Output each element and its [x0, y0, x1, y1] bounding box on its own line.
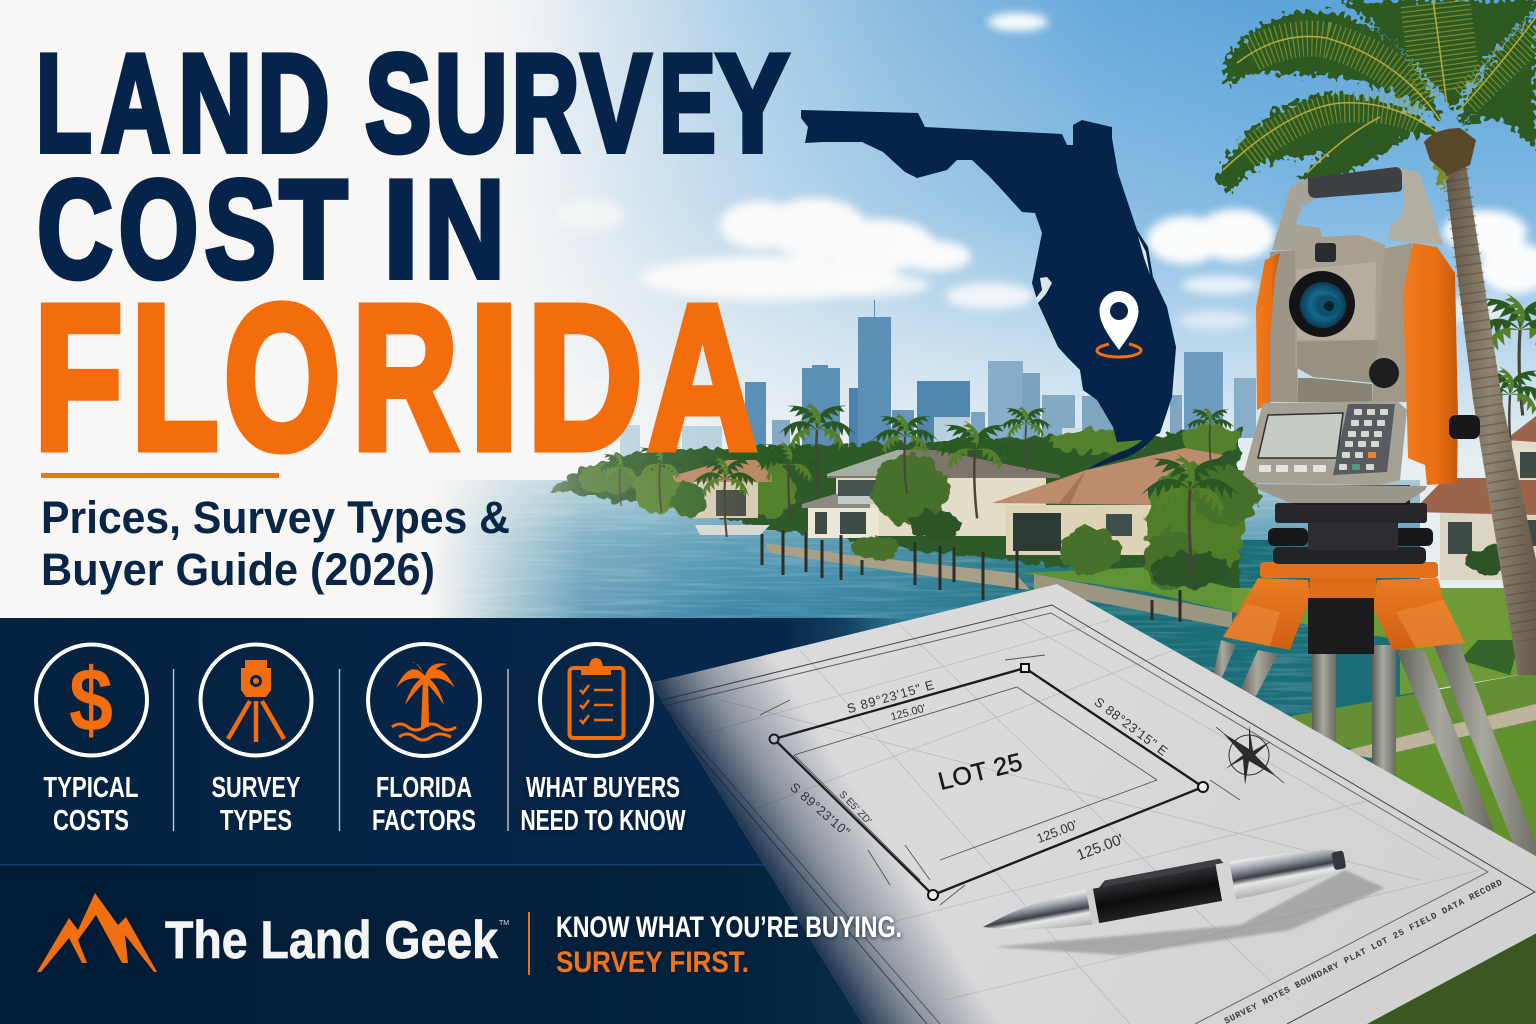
keypad — [1333, 404, 1395, 475]
bearing labels: S 88°23'15" E — [1092, 694, 1171, 759]
separators — [174, 669, 508, 831]
orange plate — [1260, 562, 1438, 578]
carrying handle — [1272, 167, 1443, 250]
small palm trees — [598, 287, 1536, 576]
tripod head left — [1223, 578, 1310, 650]
east coast lagoon — [1138, 236, 1150, 275]
lot label: LOT 25 — [935, 748, 1026, 796]
subtitle: Prices, Survey Types & — [41, 492, 510, 543]
teal water near the seawall — [800, 540, 1420, 780]
label: florida factors: FACTORS — [372, 805, 476, 837]
brand footer — [37, 893, 902, 979]
bearing labels: 125.00' — [889, 703, 927, 723]
label: florida factors: FLORIDA — [376, 772, 472, 804]
skyline — [620, 300, 1256, 465]
tagline: KNOW WHAT YOU’RE BUYING. — [556, 911, 902, 944]
label: typical costs: TYPICAL — [44, 772, 138, 804]
camera block — [1295, 235, 1385, 383]
lcd screen — [1258, 413, 1343, 458]
title line: LAND SURVEY: Y — [716, 26, 789, 181]
focus knob — [1369, 358, 1399, 388]
title line: COST IN: O — [119, 152, 198, 307]
compass rose — [1216, 725, 1284, 785]
far shoreline foliage — [550, 424, 1240, 590]
title line: FLORIDA: F — [34, 263, 122, 492]
lot boundary — [774, 668, 1203, 895]
title line: LAND SURVEY: U — [435, 26, 508, 181]
title line: COST IN: I — [384, 152, 418, 307]
feature: what buyers need to know — [520, 644, 686, 837]
label: typical costs: COSTS — [53, 805, 129, 837]
palm trunk — [1444, 165, 1536, 675]
icon: clipboard checklist — [540, 644, 652, 756]
florida keys — [1087, 420, 1162, 470]
main title — [34, 26, 789, 492]
orange housing left — [1256, 253, 1280, 410]
florida map — [801, 110, 1176, 470]
house: right side — [1412, 416, 1536, 580]
logo mountains — [37, 893, 157, 972]
label: what buyers need to know: NEED TO KNOW — [520, 805, 686, 837]
feature: survey types — [200, 644, 312, 837]
label: survey types: SURVEY — [212, 772, 300, 804]
tripod legs — [1212, 640, 1536, 860]
house: terracotta roof — [992, 448, 1223, 555]
lawns behind the instrument — [1020, 567, 1536, 1024]
subtitle — [41, 492, 510, 595]
icon: dollar sign — [36, 644, 147, 756]
icon: palm tree and waves — [368, 644, 480, 756]
display panel — [1243, 401, 1407, 485]
feature: florida factors — [368, 644, 480, 837]
water — [380, 480, 1420, 780]
bearing labels: 125.00' — [1034, 817, 1079, 846]
title line: LAND SURVEY: S — [365, 26, 432, 181]
bearing labels: 125.00' — [1074, 831, 1126, 864]
title line: FLORIDA: A — [648, 263, 757, 492]
label: what buyers need to know — [520, 772, 686, 837]
title line: LAND SURVEY: L — [36, 26, 92, 181]
label: what buyers need to know: WHAT BUYERS — [526, 772, 680, 804]
bearing labels: S 89°23'10" — [787, 780, 853, 840]
tripod hub — [1308, 598, 1374, 654]
frond highlights — [1223, 0, 1536, 173]
navy band — [0, 618, 910, 1024]
large palm tree — [1215, 0, 1536, 675]
label: florida factors — [372, 772, 476, 837]
feature: typical costs — [36, 644, 147, 837]
icon: tripod instrument — [200, 644, 312, 756]
leveling knobs — [1268, 524, 1433, 546]
icon: dollar sign: $ — [69, 651, 113, 751]
location pin — [1097, 291, 1141, 357]
title line: FLORIDA: L — [132, 263, 218, 492]
tagline: SURVEY FIRST. — [556, 946, 749, 979]
tagline — [556, 911, 902, 979]
label: survey types — [212, 772, 300, 837]
feature icons row — [36, 644, 686, 837]
label: survey types: TYPES — [220, 805, 292, 837]
bearing labels — [787, 677, 1171, 864]
palm fronds — [1215, 0, 1536, 195]
footer divider — [528, 912, 530, 975]
haze fade over scene edge — [380, 380, 780, 620]
paper grid — [680, 615, 1480, 1024]
gray columns — [1270, 250, 1298, 402]
title line: LAND SURVEY: R — [512, 26, 580, 181]
paper frame lines — [654, 605, 1535, 1024]
logo wordmark: The Land Geek — [165, 911, 498, 970]
clouds — [556, 13, 1536, 329]
white wash on the left of the sky — [0, 0, 1536, 620]
sighting camera — [1315, 243, 1336, 262]
house: white two-storey — [802, 450, 1060, 538]
palm crown — [1424, 128, 1476, 175]
label: typical costs — [44, 772, 138, 837]
tampa bay — [1036, 277, 1052, 303]
house: far salmon roof — [672, 460, 772, 518]
title line: LAND SURVEY: E — [659, 26, 716, 181]
title line: LAND SURVEY: D — [257, 26, 330, 181]
lot corner markers — [770, 664, 1208, 900]
subtitle: Buyer Guide (2026) — [41, 544, 435, 595]
title line: LAND SURVEY: N — [178, 26, 252, 181]
base plate — [1273, 547, 1426, 564]
paper survey plat — [651, 584, 1536, 1024]
side knob — [1449, 415, 1480, 439]
docks and seawall — [695, 525, 1232, 628]
soft keys — [1259, 465, 1326, 472]
title line: FLORIDA: R — [352, 263, 458, 492]
tribrach — [1275, 503, 1427, 523]
lens — [1289, 271, 1355, 337]
tripod head right — [1373, 578, 1465, 650]
title line: COST IN: S — [205, 152, 276, 307]
title line: FLORIDA: I — [469, 263, 519, 492]
pen shadow — [994, 870, 1385, 955]
title line: COST IN: N — [425, 152, 505, 307]
title block text: SURVEY NOTES BOUNDARY PLAT LOT 25 FIELD DATA RECORD — [1223, 878, 1505, 1024]
paper sheet — [651, 584, 1536, 1024]
houses — [672, 416, 1536, 580]
title line: FLORIDA: D — [527, 263, 642, 492]
orange rule — [41, 473, 279, 478]
bearing labels: S E5' ZD' — [837, 789, 873, 827]
paper dark fade — [651, 584, 1536, 1024]
title line: LAND SURVEY: A — [101, 26, 170, 181]
title line: COST IN: C — [37, 152, 113, 307]
water ripples — [420, 490, 1320, 730]
pen — [979, 837, 1348, 945]
foliage and bushes — [672, 454, 1525, 590]
title line: FLORIDA: O — [224, 263, 340, 492]
dimension lines — [760, 655, 1240, 905]
bearing labels: S 89°23'15" E — [845, 677, 936, 716]
orange housing right — [1403, 243, 1458, 485]
title line: LAND SURVEY: V — [581, 26, 651, 181]
trademark: TM — [499, 920, 509, 927]
title line: COST IN: T — [280, 152, 347, 307]
total station instrument — [1223, 167, 1480, 654]
